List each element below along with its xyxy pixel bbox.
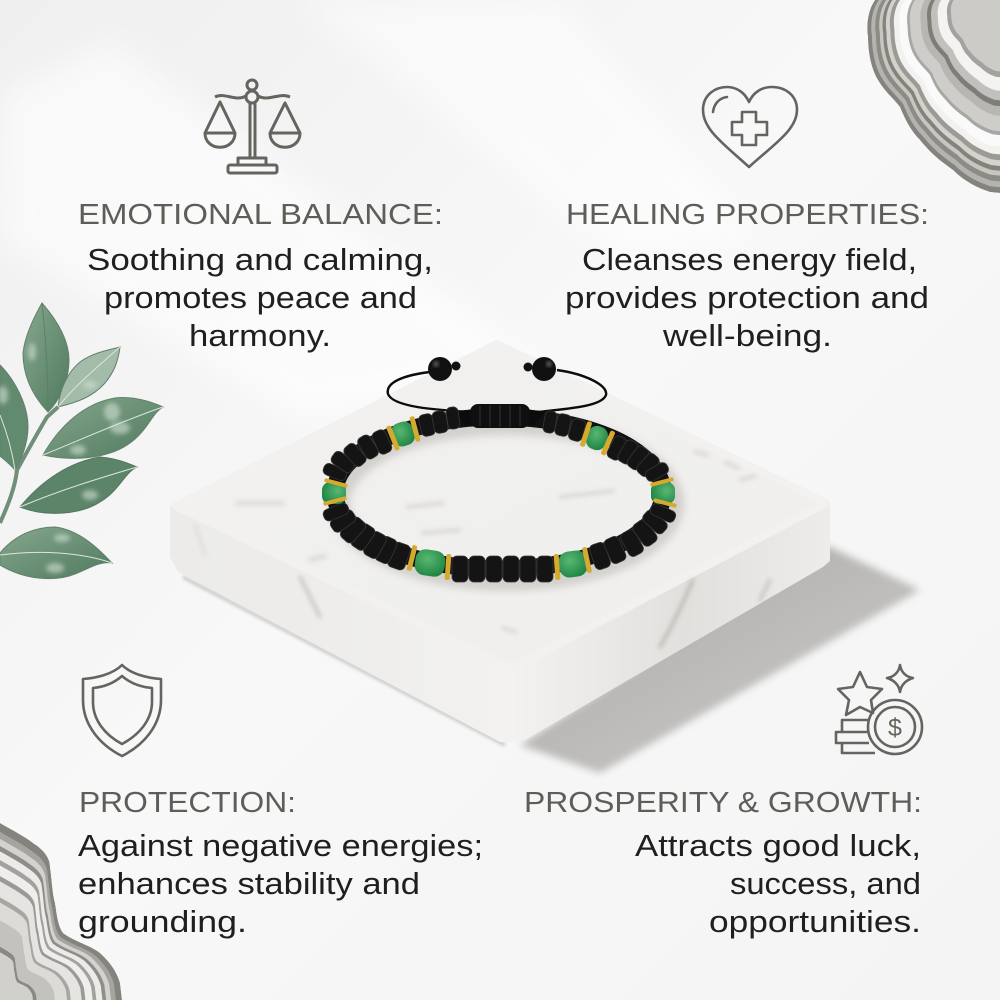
green jade beads: [322, 419, 675, 579]
leaf 4: [20, 457, 137, 513]
panel: prosperity and growth: [524, 665, 922, 939]
cord loop: [388, 370, 606, 413]
black beads: [322, 406, 677, 582]
heading: PROTECTION:: [79, 787, 296, 819]
description: harmony.: [189, 318, 331, 353]
front left face: [170, 505, 512, 742]
panel: protection: [78, 665, 483, 939]
description: [87, 242, 433, 353]
description: well-being.: [662, 318, 832, 353]
front right face: [510, 503, 830, 742]
heading: EMOTIONAL BALANCE:: [78, 199, 443, 231]
heading: HEALING PROPERTIES:: [566, 199, 929, 231]
description: opportunities.: [709, 904, 921, 939]
icon: star and coins: [836, 665, 922, 754]
geode slice: bottom left: [0, 823, 122, 1000]
light patches: [0, 343, 130, 573]
bracelet shadow: [340, 425, 674, 581]
heading: PROSPERITY & GROWTH:: [524, 787, 922, 819]
icon: star and coins: $: [888, 714, 902, 742]
description: enhances stability and: [78, 866, 420, 901]
gold spacers: [323, 416, 677, 580]
description: Attracts good luck,: [635, 828, 921, 863]
leaf veins: [0, 303, 163, 563]
watercolor leaves: [0, 303, 163, 579]
description: grounding.: [78, 904, 247, 939]
description: promotes peace and: [104, 280, 417, 315]
panel: healing properties: [565, 87, 929, 353]
marble veins: [195, 452, 770, 647]
description: success, and: [730, 866, 921, 901]
icon: heart with cross: [703, 87, 797, 167]
leaf 5: [0, 527, 112, 579]
bead core ring: [335, 417, 663, 569]
description: Against negative energies;: [78, 828, 483, 863]
description: [635, 828, 921, 939]
description: Soothing and calming,: [87, 242, 433, 277]
icon: scales: [205, 80, 300, 173]
description: [565, 242, 929, 353]
leaf 2: [58, 347, 120, 407]
icon: shield: [83, 665, 161, 756]
top surface: [176, 344, 826, 668]
description: provides protection and: [565, 280, 929, 315]
sliding balls: [428, 357, 556, 381]
leaf 6: [0, 365, 28, 470]
panel: emotional balance: [78, 80, 443, 353]
description: [78, 828, 483, 939]
bracelet: [322, 357, 677, 582]
geode slice: top right: [867, 0, 1000, 193]
description: Cleanses energy field,: [582, 242, 917, 277]
leaf 1: [23, 303, 69, 412]
macrame knot: [455, 404, 545, 428]
leaf 3: [43, 398, 163, 458]
cast shadow: [520, 545, 920, 773]
marble block: [170, 344, 920, 773]
stem: [0, 407, 58, 523]
